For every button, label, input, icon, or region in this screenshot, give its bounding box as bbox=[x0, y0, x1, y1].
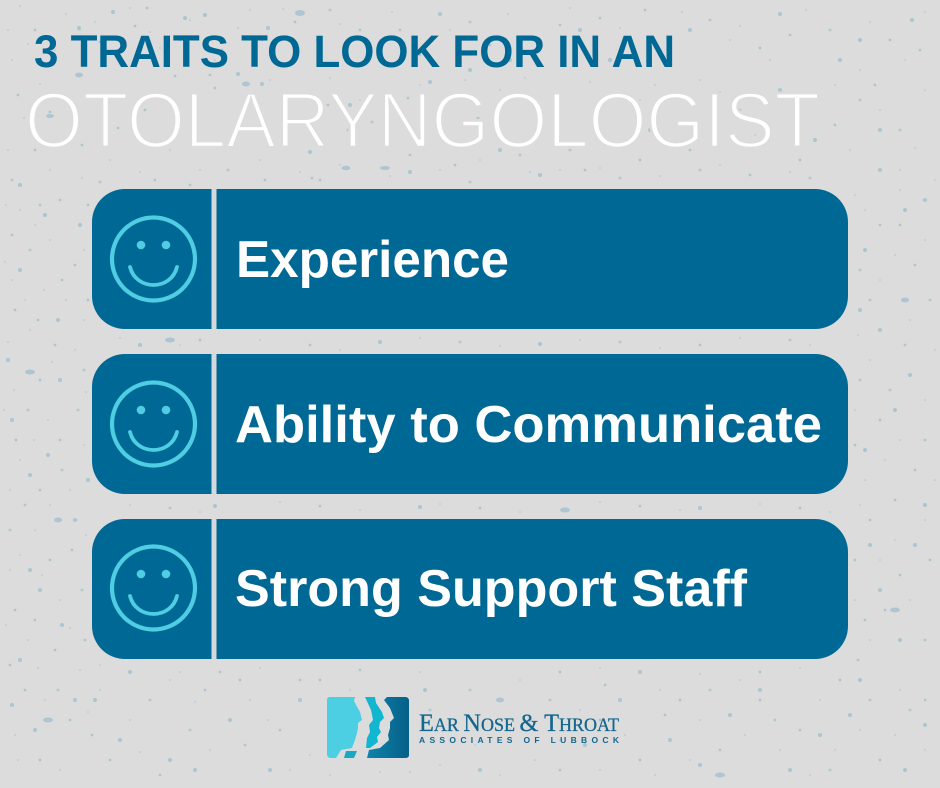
icon: three face profiles bbox=[327, 697, 409, 758]
icon: smiley bbox=[112, 546, 195, 630]
title: 3 traits to look for in an: 3 TRAITS TO LOOK FOR IN AN bbox=[34, 26, 675, 77]
label: ability to communicate: Ability to Communicate bbox=[235, 396, 822, 454]
title: otolaryngologist: OTOLARYNGOLOGIST bbox=[25, 76, 820, 164]
label: strong support staff: Strong Support Staff bbox=[235, 560, 748, 618]
panel: ability to communicate bbox=[92, 354, 848, 494]
icon: smiley bbox=[112, 218, 195, 300]
panel: experience bbox=[92, 189, 848, 329]
label: experience: Experience bbox=[236, 231, 509, 289]
wordmark: associates of lubbock: ASSOCIATES OF LUBBOCK bbox=[419, 735, 620, 745]
panel: strong support staff bbox=[92, 519, 848, 659]
logo: ear nose and throat associates of lubbock bbox=[327, 697, 620, 758]
icon: smiley bbox=[112, 382, 195, 466]
wordmark: ear nose and throat: EAR NOSE & THROAT bbox=[419, 710, 619, 737]
